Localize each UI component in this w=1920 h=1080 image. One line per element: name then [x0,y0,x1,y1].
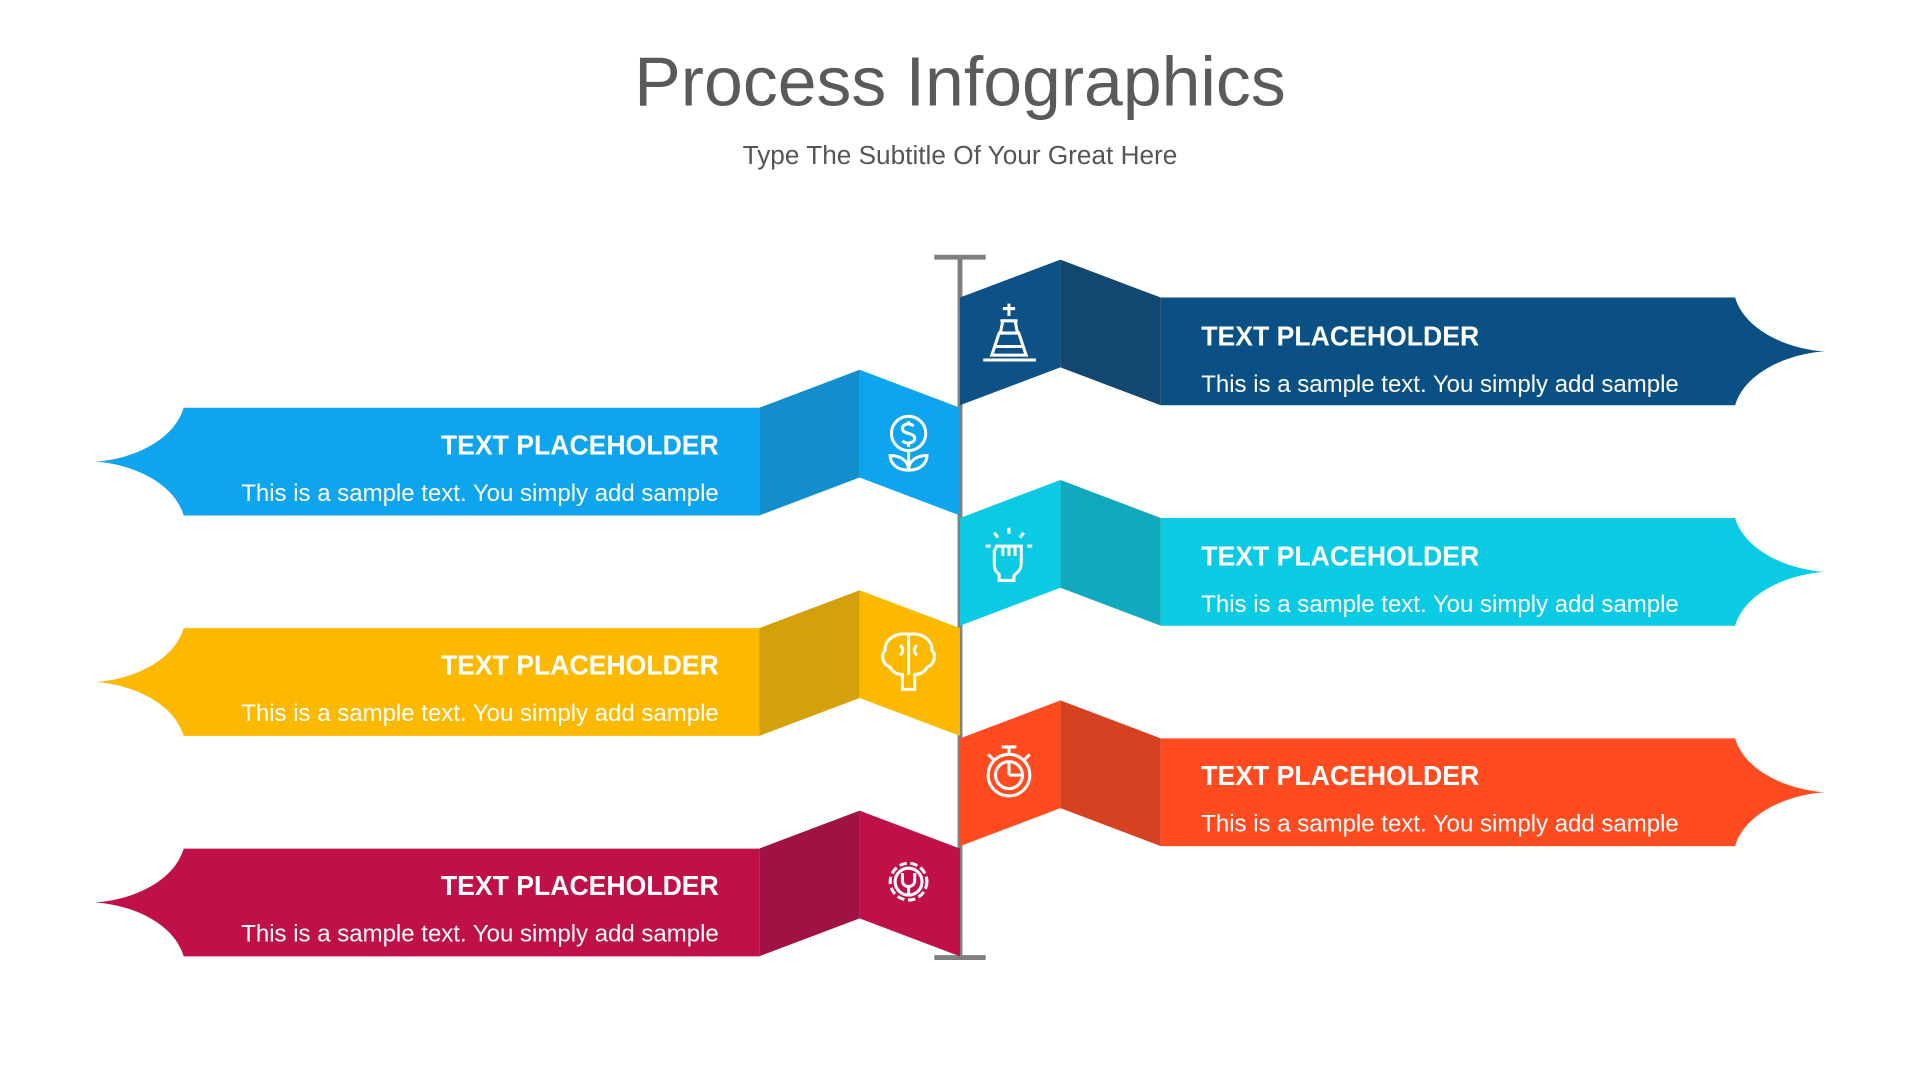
ribbon right 1: This is a sample text. You simply add sample [1201,371,1679,398]
title: Process Infographics [634,42,1286,120]
ribbon left 1: TEXT PLACEHOLDER [441,429,719,460]
ribbon right 1 [960,260,1824,405]
ribbon left 3: TEXT PLACEHOLDER [441,870,719,901]
ribbon right 2: TEXT PLACEHOLDER [1201,541,1479,572]
ribbon left 2: This is a sample text. You simply add sample [241,700,719,727]
ribbon right 3 [960,700,1824,846]
ribbon right 1: TEXT PLACEHOLDER [1201,320,1479,351]
icon: stopwatch [988,747,1030,796]
icon: chess king [983,304,1036,360]
ribbon right 2 [960,480,1824,626]
icon: fist [986,528,1032,580]
icon: brain bulb [883,634,934,689]
ribbon right 2: This is a sample text. You simply add sample [1201,591,1679,618]
subtitle: Type The Subtitle Of Your Great Here [743,142,1177,170]
icon: gear wrench [890,863,927,900]
ribbon left 3: This is a sample text. You simply add sample [241,921,719,948]
ribbon left 1: This is a sample text. You simply add sample [241,480,719,507]
ribbon right 3: This is a sample text. You simply add sample [1201,810,1679,837]
ribbon right 3: TEXT PLACEHOLDER [1201,760,1479,791]
ribbon left 3 [96,811,960,956]
icon: money plant [890,416,927,470]
ribbon left 2 [96,590,960,736]
timeline stem [934,257,986,958]
ribbon left 2: TEXT PLACEHOLDER [441,650,719,681]
ribbon left 1 [96,370,960,516]
